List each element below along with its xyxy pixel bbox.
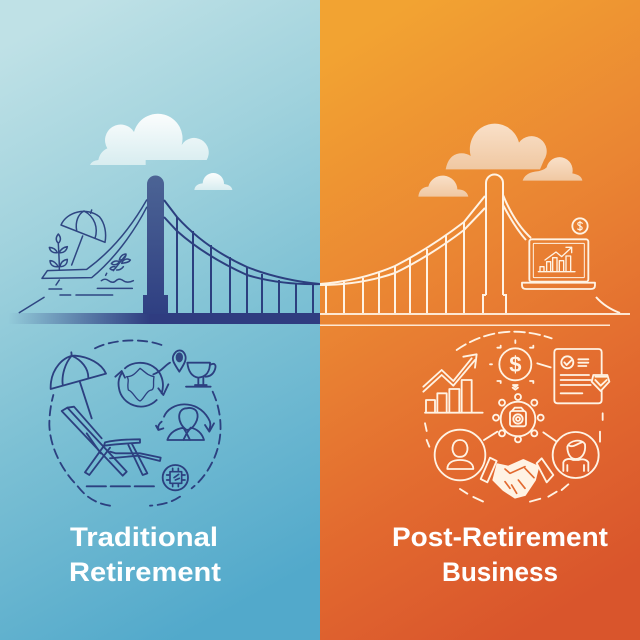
growth chart	[423, 354, 483, 413]
dashed circle	[49, 340, 221, 506]
water	[101, 273, 133, 282]
bridge tower	[483, 174, 506, 313]
heading: post-retirement business: Business	[442, 557, 558, 587]
dollar coin	[490, 340, 533, 387]
goblet cup	[186, 363, 216, 387]
heading: post-retirement business: Post-Retirement	[392, 522, 608, 552]
umbrella	[61, 210, 106, 265]
circle group: post-retirement business icons	[423, 332, 609, 502]
bridge tower	[143, 176, 168, 314]
person with circular arrows	[156, 404, 214, 440]
panel: business background	[320, 0, 640, 640]
bridge deck	[8, 313, 320, 324]
panel: traditional background	[0, 0, 320, 640]
bridge: traditional half	[8, 176, 320, 324]
heading: traditional retirement: Retirement	[69, 557, 221, 587]
suspension cables	[320, 196, 485, 284]
chip badge	[163, 465, 188, 490]
coin	[572, 218, 588, 234]
dashed circle	[425, 332, 603, 502]
right plant	[110, 254, 130, 271]
circle group: traditional retirement icons	[49, 340, 221, 506]
icon: beach scene with umbrella and plants	[19, 200, 147, 313]
circular arrows with map outline	[115, 363, 170, 407]
left plant	[49, 234, 67, 269]
document with check	[537, 349, 609, 403]
map pin	[173, 350, 186, 372]
clouds: traditional side	[90, 114, 232, 190]
dashed inner line	[87, 484, 154, 489]
lounger ramp into cable	[42, 200, 147, 278]
umbrella	[51, 352, 106, 418]
laptop screen	[529, 239, 588, 282]
laptop base	[522, 283, 595, 289]
bridge: business half	[320, 174, 630, 326]
dollar coin: $	[509, 352, 521, 377]
clouds: business side	[418, 124, 582, 197]
bars	[538, 256, 575, 272]
handshake	[481, 458, 553, 498]
gear with camera	[493, 388, 544, 442]
deck chair	[62, 407, 161, 476]
right person badge	[543, 432, 599, 478]
left person badge	[435, 430, 497, 480]
bridge deck lines	[320, 313, 630, 326]
trend arrow	[545, 247, 572, 260]
shore dashes	[19, 280, 132, 313]
heading: traditional retirement: Traditional	[70, 522, 218, 552]
suspension cables	[164, 200, 320, 313]
icon: laptop with growth chart	[522, 218, 595, 289]
